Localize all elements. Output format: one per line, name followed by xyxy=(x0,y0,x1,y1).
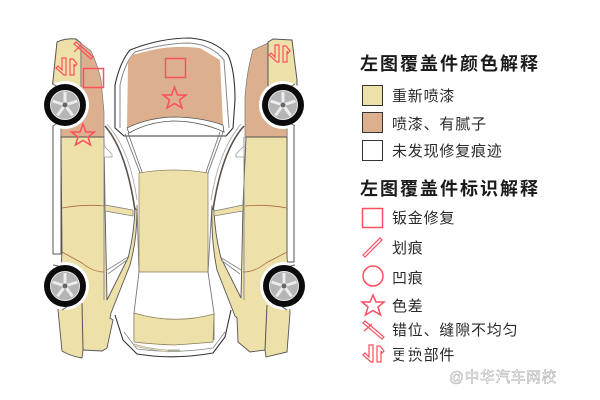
left swap arrows xyxy=(56,58,77,75)
label: putty: 喷漆、有腻子 xyxy=(392,116,487,133)
left square marker xyxy=(84,68,104,88)
roof cream xyxy=(139,170,208,272)
icon: star xyxy=(362,295,384,315)
right front brown fender xyxy=(245,43,287,137)
left A pillar xyxy=(105,126,135,210)
right mirror xyxy=(236,146,244,157)
rear plate strip xyxy=(168,350,180,352)
right window pillar xyxy=(214,205,243,216)
left front wheel arch xyxy=(41,81,89,129)
left misalign marker xyxy=(74,42,93,59)
hood square marker xyxy=(166,58,186,78)
trunk cream xyxy=(134,313,214,345)
left doors cream xyxy=(58,137,137,358)
label: no trace: 未发现修复痕迹 xyxy=(392,142,503,160)
icon: square xyxy=(362,208,382,228)
hood surround xyxy=(115,38,235,136)
label: dent: 凹痕 xyxy=(392,270,424,287)
centre car body xyxy=(115,38,235,357)
left window lines xyxy=(104,137,128,300)
left front brown fender xyxy=(61,39,104,137)
left front wheel xyxy=(44,84,86,126)
label smudges xyxy=(392,346,424,364)
body side lines xyxy=(134,205,214,340)
swatch: putty xyxy=(362,112,382,132)
right swap arrows xyxy=(269,45,290,62)
icon: misalignment xyxy=(363,321,384,339)
right front cream fender xyxy=(268,39,297,88)
left window pillar xyxy=(105,205,133,216)
right sill strip xyxy=(287,125,294,262)
label: misalignment: 错位、缝隙不均匀 xyxy=(392,322,518,339)
left rear wheel arch xyxy=(41,262,89,310)
left door seams xyxy=(62,205,104,272)
right A pillar xyxy=(213,126,244,210)
cowl band xyxy=(127,117,224,133)
right front arch line xyxy=(283,84,295,126)
left rear panel divider xyxy=(82,303,83,350)
right door seams xyxy=(243,205,287,272)
rear bumper xyxy=(115,310,231,357)
left rear wheel xyxy=(44,265,86,307)
label: panel repair: 钣金修复 xyxy=(392,209,455,227)
left rear arch line xyxy=(53,265,75,310)
left sill strip xyxy=(53,125,61,254)
right side panel of car xyxy=(211,39,308,357)
right rear wheel arch xyxy=(260,262,308,310)
label: colour difference: 色差 xyxy=(392,298,424,315)
right rear panel divider xyxy=(265,305,267,350)
watermark: @中华汽车网校 xyxy=(449,369,557,386)
marker legend heading: 左图覆盖件标识解释 xyxy=(360,178,540,199)
right window lines xyxy=(220,137,244,300)
label: scratch: 划痕 xyxy=(392,240,424,257)
left side panel of car xyxy=(41,39,137,358)
swatch: repaint xyxy=(362,86,382,106)
swatch: no trace xyxy=(362,140,382,160)
icon: swap arrows xyxy=(363,345,384,362)
hood brown xyxy=(127,47,223,128)
left mirror xyxy=(104,146,112,157)
label: replaced parts: 更换部件 xyxy=(392,347,455,364)
marker legend xyxy=(362,208,518,364)
right rear arch line xyxy=(274,265,295,310)
hood star marker xyxy=(163,87,186,108)
icon: dent xyxy=(363,266,383,286)
colour legend xyxy=(362,86,503,160)
right front wheel arch xyxy=(259,81,307,129)
left front arch line xyxy=(53,84,65,126)
right rear wheel xyxy=(263,265,305,307)
right front wheel xyxy=(262,84,304,126)
icon: scratch xyxy=(363,238,382,257)
colour legend heading: 左图覆盖件颜色解释 xyxy=(360,53,540,74)
windshield side lines xyxy=(125,132,223,173)
left star marker xyxy=(72,124,94,145)
label: repaint: 重新喷漆 xyxy=(392,88,455,105)
left front cream fender xyxy=(52,39,81,90)
right doors cream xyxy=(212,137,290,357)
